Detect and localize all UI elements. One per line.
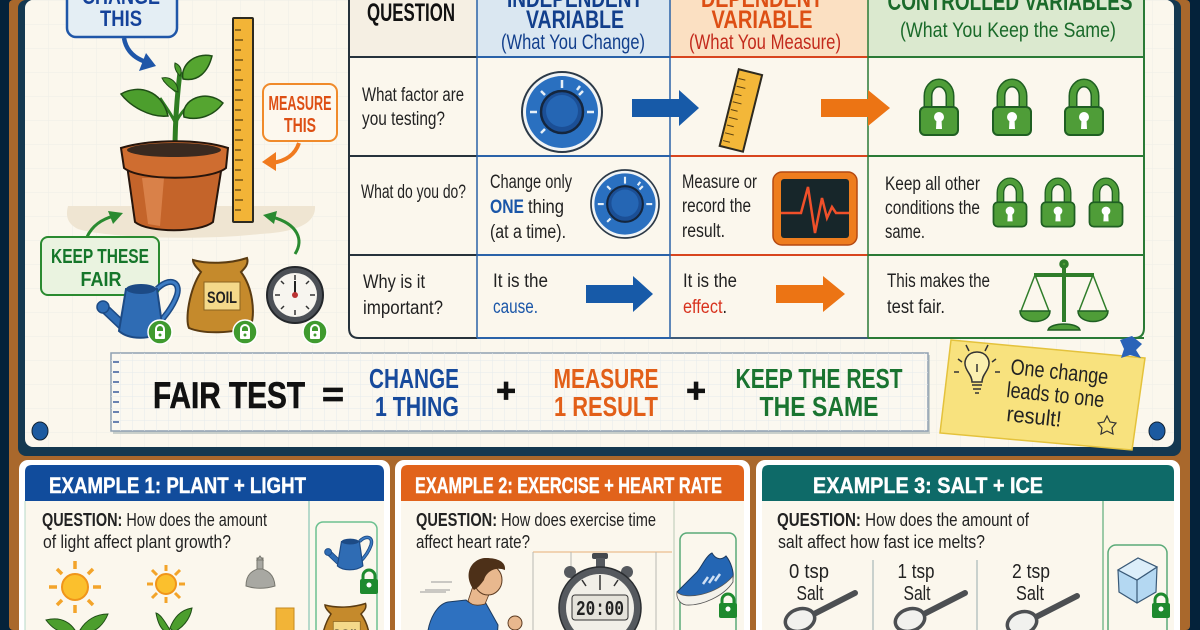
spoon 2 bbox=[1004, 596, 1077, 630]
spoon 1 bbox=[892, 593, 965, 630]
header: dependent variable: (What You Measure) bbox=[689, 31, 841, 54]
row 3 bbox=[493, 261, 1108, 330]
icon: shoe bbox=[677, 553, 733, 605]
controlled box bbox=[316, 522, 377, 630]
row 3: This makes the bbox=[887, 271, 990, 292]
icon: dial bbox=[522, 72, 602, 152]
icon: balance scale bbox=[1020, 261, 1108, 330]
stopwatch display: 20:00 bbox=[576, 599, 624, 622]
sticky note bbox=[940, 336, 1145, 450]
salt 2 tsp: Salt bbox=[1016, 583, 1044, 605]
icon: medium sun bbox=[147, 565, 185, 603]
equation: keep the rest: THE SAME bbox=[760, 391, 878, 422]
header: independent variable: VARIABLE bbox=[526, 6, 624, 34]
row 3: It is the bbox=[493, 271, 548, 292]
icon: ruler bbox=[233, 18, 253, 222]
row 2: result. bbox=[682, 221, 725, 242]
icon: flower pot bbox=[121, 141, 228, 230]
icon: pushpin bbox=[1120, 336, 1142, 358]
panel: example 1: EXAMPLE 1: PLANT + LIGHT bbox=[49, 473, 306, 498]
row 1 icons bbox=[522, 69, 1103, 152]
icons: small locks bbox=[148, 320, 327, 344]
icons: locks bbox=[920, 83, 1103, 135]
controlled box bbox=[1108, 545, 1167, 630]
example 1 question: QUESTION: bbox=[42, 510, 122, 530]
fair test banner: + bbox=[686, 372, 706, 410]
note text: result! bbox=[1005, 401, 1063, 432]
icon: ice cube bbox=[1118, 558, 1157, 603]
row labels bbox=[361, 85, 466, 319]
salt 0 tsp: 0 tsp bbox=[789, 561, 829, 583]
icons: small locks row 2 bbox=[993, 181, 1123, 227]
icon: star bbox=[1098, 416, 1116, 434]
equation: change 1 thing: CHANGE bbox=[369, 363, 459, 394]
row 2: Keep all other bbox=[885, 174, 981, 195]
fair test banner: + bbox=[496, 372, 516, 410]
row 2: conditions the bbox=[885, 198, 980, 219]
row 2 bbox=[490, 170, 1123, 245]
icon: plant sprouts bbox=[46, 608, 192, 630]
fair test banner: = bbox=[322, 376, 344, 414]
row labels: Why is it bbox=[363, 272, 426, 293]
icon: soil bag bbox=[188, 258, 253, 332]
arrow: orange bbox=[821, 90, 890, 126]
table shadow bbox=[67, 206, 315, 238]
table rules bbox=[349, 0, 1144, 338]
header: independent variable: (What You Change) bbox=[501, 31, 645, 54]
panel: example 1: of light affect plant growth? bbox=[43, 532, 231, 552]
row labels: important? bbox=[363, 298, 443, 319]
row labels: What factor are bbox=[362, 85, 464, 106]
note text: leads to one bbox=[1005, 377, 1106, 412]
salt 1 tsp: 1 tsp bbox=[898, 561, 934, 583]
note text: One change bbox=[1009, 354, 1110, 389]
panel: example 2: EXAMPLE 2: EXERCISE + HEART RATE bbox=[415, 473, 722, 498]
controlled box bbox=[680, 533, 736, 630]
header: controlled variables bbox=[888, 0, 1132, 42]
panel: example 3: salt affect how fast ice melts? bbox=[778, 532, 985, 552]
example 3 question: How does the amount of bbox=[866, 510, 1061, 530]
icon: small dial bbox=[591, 170, 659, 238]
row 2: same. bbox=[885, 222, 925, 243]
fair test banner bbox=[111, 353, 930, 434]
header: dependent variable: VARIABLE bbox=[712, 6, 812, 34]
row 2: thing bbox=[528, 197, 564, 218]
equation: keep the rest: KEEP THE REST bbox=[736, 363, 902, 394]
example 1 question: How does the amount bbox=[127, 510, 302, 530]
icon: soil small bbox=[321, 604, 370, 630]
row 3: It is the bbox=[683, 271, 737, 292]
header: independent variable bbox=[501, 0, 645, 54]
equation: fair test: FAIR TEST bbox=[153, 375, 305, 416]
row 3: cause. bbox=[493, 297, 538, 318]
panel: example 2 bbox=[395, 460, 750, 630]
icon: watering can small bbox=[325, 537, 371, 570]
row 3: effect. bbox=[683, 297, 727, 318]
panel: example 3 bbox=[756, 460, 1180, 630]
spoon 0 bbox=[782, 593, 855, 630]
callout: keep these fair bbox=[41, 211, 299, 295]
illustration: plant experiment bbox=[41, 0, 337, 344]
row 2: ONE bbox=[490, 197, 524, 218]
example 3 header bbox=[762, 465, 1174, 501]
example 3 question: QUESTION: bbox=[777, 510, 861, 530]
row 2: Measure or bbox=[682, 172, 758, 193]
icon: clock bbox=[267, 267, 323, 323]
arrow: blue bbox=[586, 276, 653, 312]
icon: watering can bbox=[97, 282, 178, 338]
salt 0 tsp bbox=[789, 561, 829, 605]
callout: keep these fair: KEEP THESE bbox=[51, 246, 149, 268]
example 2 header bbox=[401, 465, 744, 501]
callout: measure this: THIS bbox=[284, 115, 316, 137]
panel: example 1 bbox=[19, 460, 390, 630]
header: dependent variable bbox=[689, 0, 841, 54]
row 2: (at a time). bbox=[490, 222, 566, 243]
icon: small ruler bbox=[276, 608, 294, 630]
panel: example 3: EXAMPLE 3: SALT + ICE bbox=[813, 473, 1043, 498]
icon: large sun bbox=[49, 561, 101, 613]
callout: keep these fair: FAIR bbox=[80, 269, 122, 291]
icon: light bulb bbox=[954, 345, 1000, 393]
header: controlled variables: (What You Keep the Same) bbox=[900, 19, 1116, 42]
salt 0 tsp: Salt bbox=[796, 583, 824, 605]
row 3: test fair. bbox=[887, 297, 945, 318]
icon: stopwatch bbox=[559, 553, 641, 630]
arrow: orange bbox=[776, 276, 845, 312]
example 2 question: How does exercise time bbox=[502, 510, 693, 530]
icon: heart monitor bbox=[773, 172, 857, 245]
arrow: blue bbox=[632, 90, 699, 126]
equation: keep the rest bbox=[736, 363, 902, 422]
equation: measure 1 result: MEASURE bbox=[554, 363, 658, 394]
example 2 question: QUESTION: bbox=[416, 510, 497, 530]
note text bbox=[1005, 354, 1110, 432]
equation: change 1 thing: 1 THING bbox=[375, 391, 459, 422]
icon: runner bbox=[420, 558, 522, 630]
callout: change this bbox=[67, 0, 177, 71]
pins bbox=[32, 422, 1165, 440]
table backgrounds bbox=[349, 0, 1144, 338]
panel: example 2: affect heart rate? bbox=[416, 532, 530, 552]
equation: change 1 thing bbox=[369, 363, 459, 422]
salt 2 tsp: 2 tsp bbox=[1012, 561, 1050, 583]
salt 1 tsp: Salt bbox=[904, 583, 931, 605]
callout: measure this bbox=[262, 84, 337, 171]
icon: tilted ruler bbox=[720, 69, 762, 152]
row labels: What do you do? bbox=[361, 182, 466, 203]
equation: measure 1 result bbox=[554, 363, 658, 422]
callout: measure this: MEASURE bbox=[268, 93, 332, 115]
callout: change this: THIS bbox=[100, 6, 142, 31]
salt 1 tsp bbox=[898, 561, 934, 605]
salt 2 tsp bbox=[1012, 561, 1050, 605]
equation: measure 1 result: 1 RESULT bbox=[554, 391, 658, 422]
icon: soil bag: SOIL bbox=[207, 288, 237, 307]
example 1 header bbox=[25, 465, 384, 501]
row 2: Change only bbox=[490, 172, 572, 193]
row 2: record the bbox=[682, 196, 751, 217]
row labels: you testing? bbox=[362, 109, 445, 130]
icon: lamp bbox=[246, 556, 275, 588]
table bbox=[349, 0, 1144, 338]
icon: plant bbox=[121, 55, 223, 150]
